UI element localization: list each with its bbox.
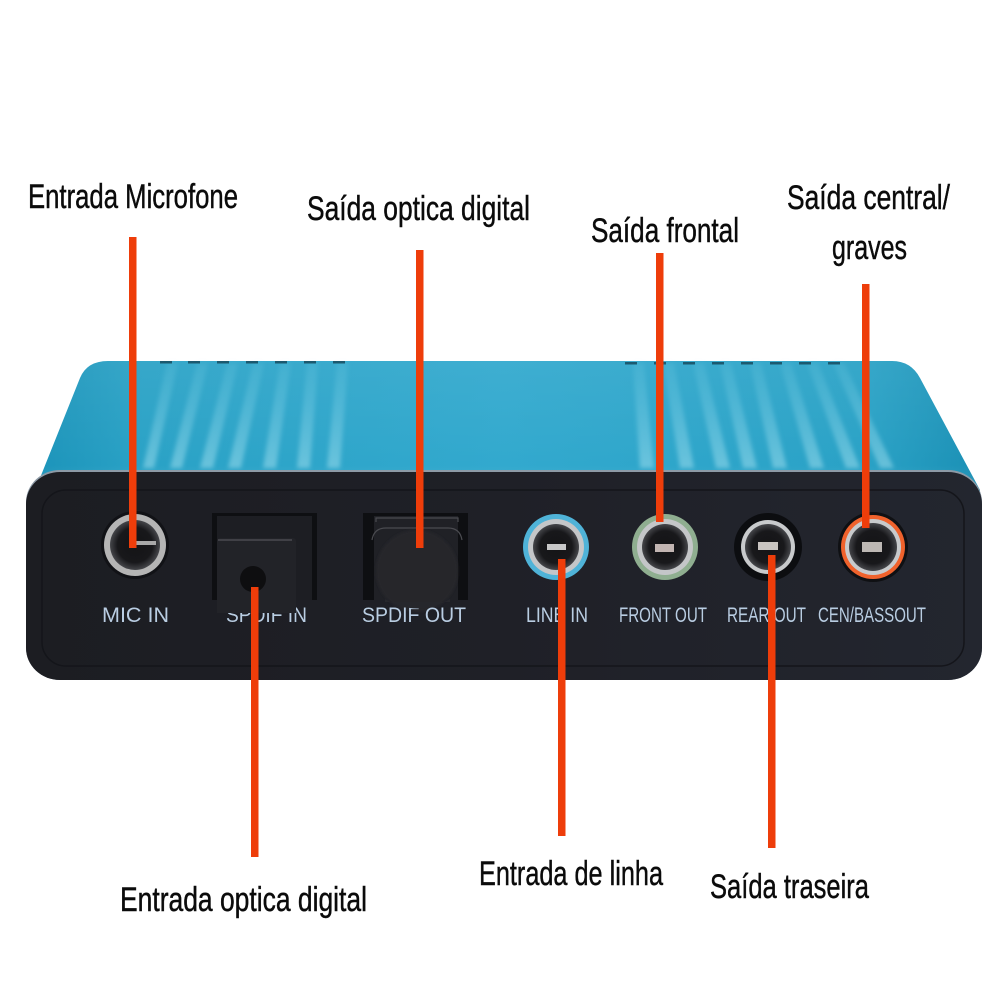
ridges: left group (143, 363, 348, 468)
device: black front panel (26, 470, 982, 680)
arrow line: front out (656, 253, 664, 522)
label: center/bass output: graves (832, 229, 907, 267)
label: front output: Saída frontal (591, 212, 739, 250)
printed port labels: LINE IN (526, 604, 588, 627)
label: microphone input: Entrada Microfone (28, 178, 238, 216)
arrow line: optical in (251, 587, 258, 857)
label: rear output: Saída traseira (710, 868, 869, 906)
arrow line: line in (558, 559, 566, 836)
label: center/bass output: Saída central/ (787, 179, 950, 217)
jack: center/bass out (orange ring) (838, 512, 908, 582)
arrow line: rear out (768, 555, 776, 848)
label: digital optical output: Saída optica digital (307, 190, 530, 228)
printed port labels: SPDIF IN (226, 604, 307, 627)
printed port labels: SPDIF OUT (362, 604, 466, 627)
SPDIF in cap overlapping its printed label (217, 598, 296, 613)
device: blue aluminium top (28, 361, 980, 510)
jack: line in (blue ring) (523, 514, 589, 580)
ridges: right group (633, 363, 894, 468)
label: line input: Entrada de linha (479, 855, 663, 893)
printed port labels: CEN/BASSOUT (818, 604, 926, 627)
jack: rear out (black ring) (734, 513, 802, 581)
arrow line: mic in (129, 237, 136, 548)
jack: front out (green ring) (632, 514, 698, 580)
port: SPDIF in with cap (212, 513, 317, 613)
port: SPDIF out with cap (363, 513, 468, 612)
printed port labels (102, 604, 926, 627)
printed port labels: MIC IN (102, 604, 169, 627)
jack: mic in (101, 511, 169, 579)
printed port labels: FRONT OUT (619, 604, 707, 627)
vent slots (160, 361, 840, 364)
SPDIF out cap overlapping its printed label (385, 599, 450, 608)
arrow line: optical out (416, 250, 424, 548)
arrow line: center/bass out (862, 284, 870, 528)
label: digital optical input: Entrada optica digital (120, 881, 367, 919)
printed port labels: REAR OUT (727, 604, 806, 627)
label: center/bass output (787, 179, 950, 267)
